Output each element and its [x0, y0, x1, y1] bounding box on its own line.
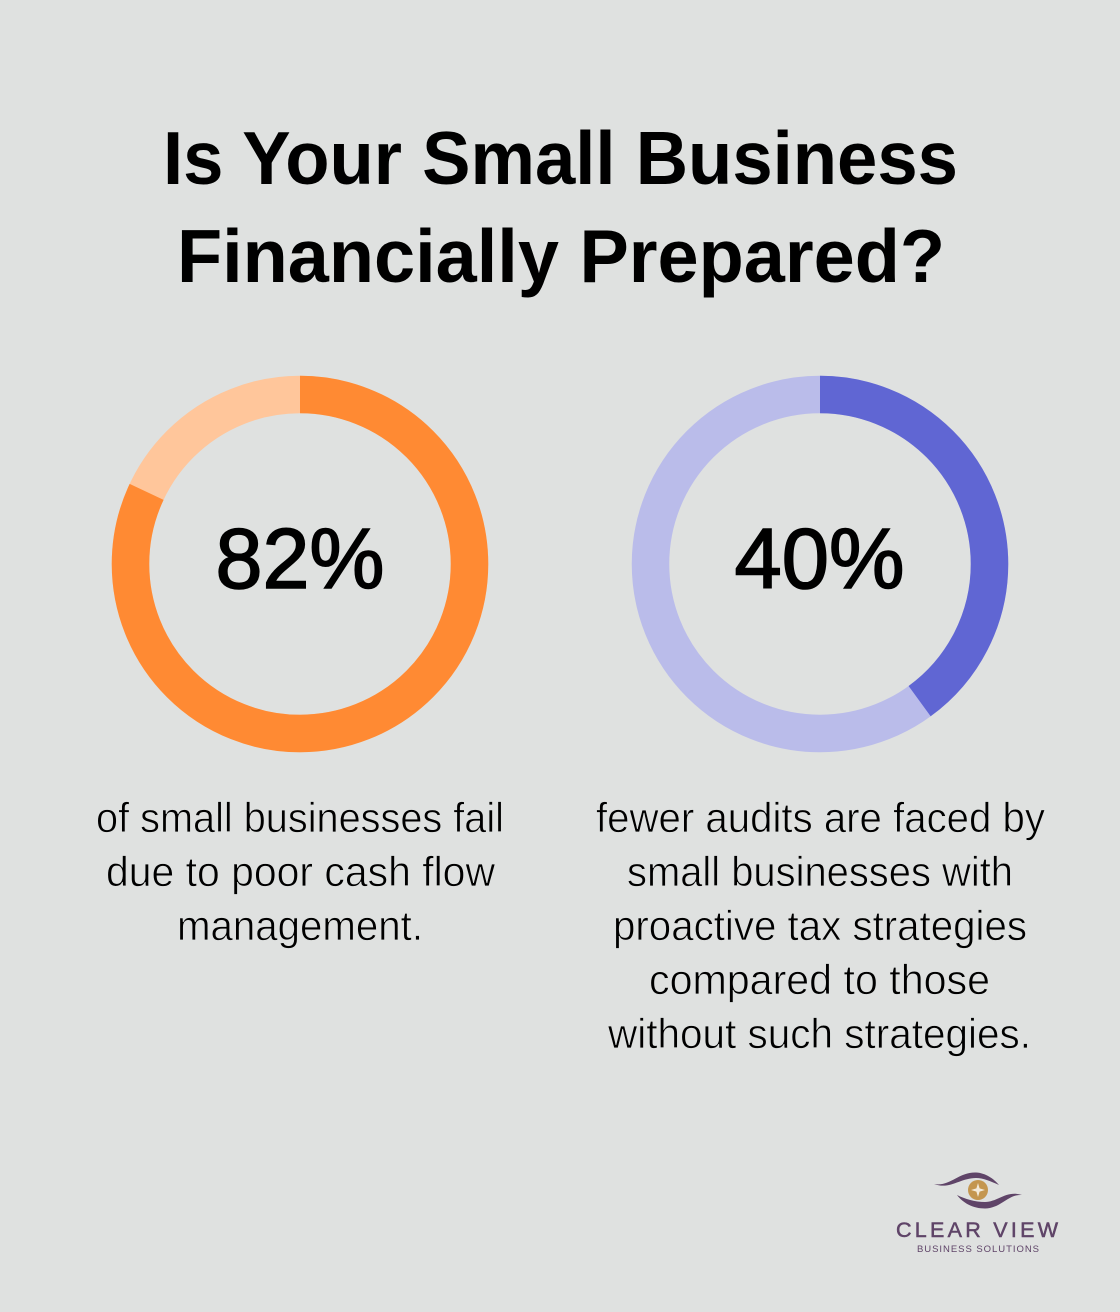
donut chart: 40% — [650, 394, 990, 734]
logo wordmark: CLEAR VIEW — [896, 1218, 1059, 1242]
logo tagline: BUSINESS SOLUTIONS — [917, 1244, 1039, 1255]
description: audits: without such strategies. — [607, 1010, 1031, 1057]
description: audits: proactive tax strategies — [613, 902, 1027, 949]
icon: gold star circle — [968, 1180, 988, 1200]
description: cash flow: due to poor cash flow — [106, 848, 496, 895]
title — [163, 116, 958, 298]
description: audits: small businesses with — [627, 848, 1013, 895]
icon: eye swooshes — [934, 1172, 1022, 1208]
logo: Clear View Business Solutions — [896, 1172, 1059, 1255]
title: Is Your Small Business — [163, 116, 958, 200]
description: cash flow — [96, 794, 504, 949]
title: Financially Prepared? — [177, 214, 945, 298]
panel: 82% statistic — [96, 394, 504, 949]
description: audits: compared to those — [649, 956, 990, 1003]
value: 40%: 40% — [734, 512, 904, 607]
description: cash flow: management. — [177, 902, 423, 949]
description: cash flow: of small businesses fail — [96, 794, 504, 841]
panel: 40% statistic — [596, 394, 1045, 1057]
description: audits — [596, 794, 1045, 1057]
donut chart: 82% — [130, 394, 470, 734]
description: audits: fewer audits are faced by — [596, 794, 1045, 841]
value: 82%: 82% — [216, 512, 384, 607]
